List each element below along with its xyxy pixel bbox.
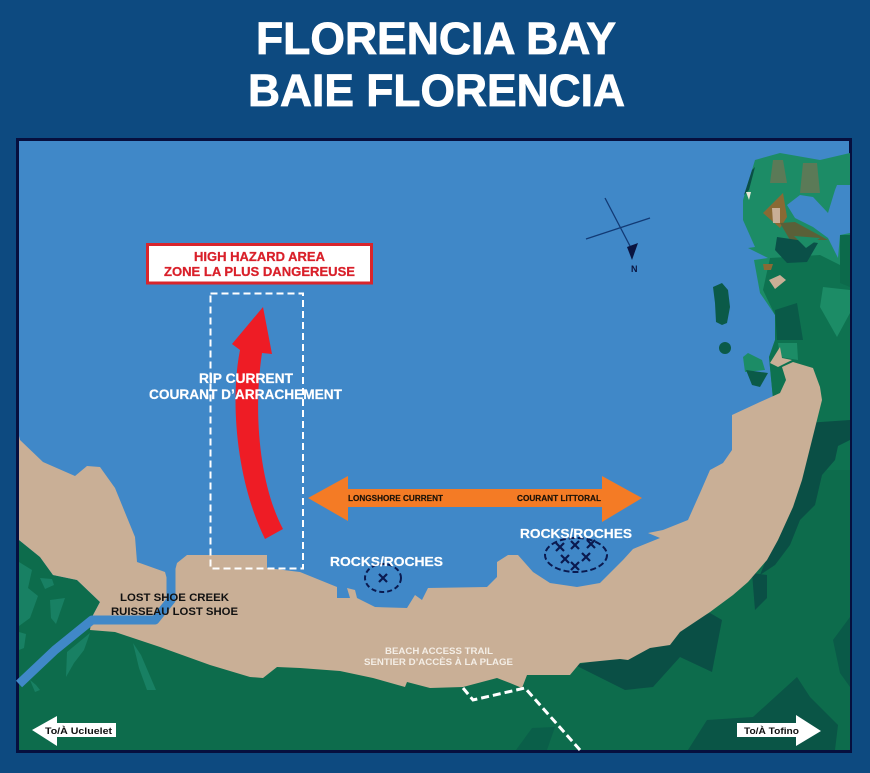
high hazard dashed zone xyxy=(210,294,303,568)
forest: north headland xyxy=(743,153,850,575)
rip current label xyxy=(149,371,343,402)
longshore current arrow: LONGSHORE CURRENT xyxy=(348,494,443,503)
red rip current arrow xyxy=(232,307,283,539)
compass xyxy=(586,198,650,274)
map panel xyxy=(18,140,850,752)
rocks marker east: ROCKS/ROCHES xyxy=(520,526,632,541)
forest: south shore xyxy=(19,400,850,750)
rocks marker west: ROCKS/ROCHES xyxy=(330,554,443,569)
rocks marker west xyxy=(330,554,443,592)
rocks marker east xyxy=(520,526,632,572)
creek xyxy=(19,565,171,684)
beach access trail label xyxy=(364,646,513,667)
arrow to Tofino: To/À Tofino xyxy=(744,726,799,737)
beach sand xyxy=(19,362,822,688)
creek label: LOST SHOE CREEK xyxy=(120,592,229,604)
high hazard label box: ZONE LA PLUS DANGEREUSE xyxy=(164,264,355,279)
arrow to Ucluelet: To/À Ucluelet xyxy=(45,726,113,737)
title: FLORENCIA BAY xyxy=(256,13,616,64)
beach access trail xyxy=(463,688,580,750)
rip current label: COURANT D’ARRACHEMENT xyxy=(149,387,343,402)
creek label: RUISSEAU LOST SHOE xyxy=(111,606,238,618)
beach access trail label: SENTIER D’ACCÈS À LA PLAGE xyxy=(364,657,513,667)
beach access trail label: BEACH ACCESS TRAIL xyxy=(385,646,494,656)
longshore current arrow: COURANT LITTORAL xyxy=(517,494,601,503)
rip current label: RIP CURRENT xyxy=(199,371,294,386)
islands xyxy=(713,283,768,387)
arrow to Tofino xyxy=(737,715,821,746)
creek label xyxy=(111,592,238,618)
high hazard label box: HIGH HAZARD AREA xyxy=(194,249,326,264)
arrow to Ucluelet xyxy=(32,716,116,746)
compass: N xyxy=(631,264,638,274)
inlet water xyxy=(787,185,850,258)
title xyxy=(248,13,625,116)
longshore current arrow xyxy=(308,476,642,522)
high hazard label box xyxy=(148,244,372,283)
title: BAIE FLORENCIA xyxy=(248,65,625,116)
